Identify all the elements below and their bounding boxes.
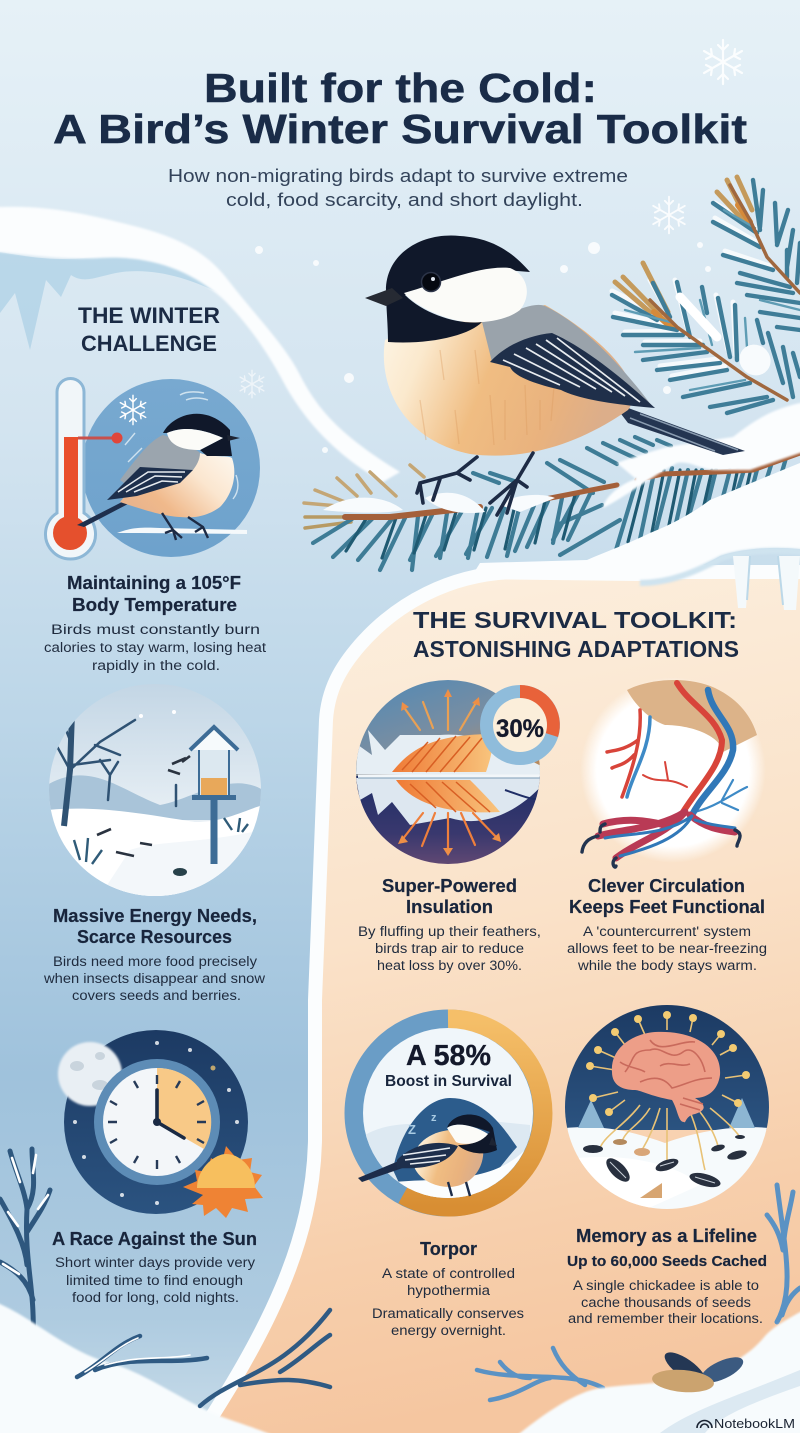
description: hypothermia (407, 1283, 491, 1298)
sunflower seeds (651, 1347, 747, 1395)
white cheek (404, 268, 527, 322)
grass and insects (74, 818, 248, 864)
bare tree bottom left (0, 1149, 50, 1335)
subtitle: How non-migrating birds adapt to survive extreme (168, 165, 628, 186)
panel: insulation (356, 680, 560, 973)
sleep letters: Z (408, 1122, 416, 1137)
heading: Super-Powered (382, 876, 517, 896)
stat: Boost in Survival (385, 1073, 512, 1090)
heat arrows (402, 695, 497, 850)
title: Built for the Cold: (204, 65, 597, 111)
bare tree (64, 712, 72, 826)
heading (382, 876, 517, 917)
description (567, 924, 767, 973)
description: while the body stays warm. (577, 958, 757, 973)
stat (385, 1040, 512, 1090)
progress ring (354, 1019, 543, 1207)
wing (490, 333, 655, 408)
feather texture (420, 350, 555, 445)
panel: circulation (567, 677, 767, 973)
description: allows feet to be near-freezing (567, 941, 767, 956)
pine branch upper right (612, 177, 800, 413)
panel: race against the sun (52, 1030, 263, 1305)
description: Dramatically conserves (372, 1306, 524, 1321)
snow bank right (470, 458, 800, 581)
description: and remember their locations. (568, 1311, 763, 1326)
description: Birds must constantly burn (51, 622, 260, 637)
description (372, 1266, 524, 1338)
title (53, 65, 747, 152)
heading (569, 876, 765, 917)
illustration circle (82, 379, 260, 557)
tail (612, 402, 745, 455)
twigs left (77, 1310, 330, 1406)
scene (360, 1025, 536, 1205)
heading: Torpor (420, 1239, 477, 1259)
description (55, 1255, 255, 1305)
description: food for long, cold nights. (72, 1290, 239, 1305)
title: A Bird’s Winter Survival Toolkit (53, 106, 747, 152)
description: birds trap air to reduce (375, 941, 524, 956)
right peach panel (190, 572, 800, 1433)
light dots (586, 1011, 750, 1116)
heading: the survival toolkit (413, 607, 739, 662)
setting sun (183, 1146, 263, 1218)
hills (47, 775, 263, 820)
description: Short winter days provide very (55, 1255, 255, 1270)
description: energy overnight. (391, 1323, 506, 1338)
description: cache thousands of seeds (581, 1295, 751, 1310)
small chickadee (77, 392, 247, 540)
snow clump on pine (733, 338, 777, 382)
dark night disc (64, 1030, 248, 1214)
twigs right (477, 1348, 603, 1400)
top left snow drift and white ribbon (0, 205, 400, 482)
heading: Maintaining a 105°F (67, 573, 241, 593)
snowflake icons (240, 40, 742, 398)
eye (422, 272, 440, 292)
head black (386, 236, 530, 343)
heading: Massive Energy Needs, (53, 906, 257, 926)
heading: the survival toolkit: ASTONISHING ADAPTATIONS (413, 636, 739, 662)
leg feathers (627, 680, 757, 752)
heading (53, 906, 257, 947)
thermometer (46, 378, 122, 559)
stars (73, 1041, 239, 1205)
winter scene circle (47, 684, 263, 896)
subtitle: cold, food scarcity, and short daylight. (226, 189, 583, 210)
heading: Keeps Feet Functional (569, 897, 765, 917)
snow shading (660, 1370, 800, 1433)
description (568, 1278, 763, 1326)
feather circle (356, 680, 545, 872)
blood vessels (582, 683, 747, 867)
30% ring: 30% (496, 715, 544, 743)
moon (58, 1042, 122, 1106)
white circle (580, 677, 766, 863)
sleep letters (408, 1112, 437, 1137)
heading: the winter challenge (78, 303, 220, 356)
description (358, 924, 541, 973)
description: rapidly in the cold. (92, 658, 220, 673)
panel: memory (565, 1005, 769, 1326)
heading: Clever Circulation (588, 876, 745, 896)
heading (67, 573, 241, 615)
den (393, 1098, 517, 1185)
description (43, 954, 265, 1003)
description: covers seeds and berries. (72, 988, 241, 1003)
neural lines (590, 1015, 746, 1170)
heading: the winter challenge: CHALLENGE (81, 331, 217, 356)
description (44, 622, 266, 673)
panel: energy needs (43, 684, 265, 1003)
bird feeder (190, 727, 238, 864)
description: when insects disappear and snow (43, 971, 265, 986)
body (384, 305, 633, 456)
heading: A Race Against the Sun (52, 1229, 257, 1249)
pines (578, 1098, 755, 1128)
description: A state of controlled (382, 1266, 515, 1281)
description: A 'countercurrent' system (583, 924, 751, 939)
description: Birds need more food precisely (53, 954, 257, 969)
wing stripes (503, 338, 640, 402)
snow ground (47, 805, 263, 896)
heading: Insulation (406, 897, 493, 917)
brain (612, 1032, 720, 1122)
description: A single chickadee is able to (573, 1278, 759, 1293)
clock (94, 1059, 220, 1185)
panel: torpor (354, 1019, 543, 1338)
main pine branch (304, 437, 800, 570)
beak (365, 288, 403, 306)
legs and claws (417, 453, 533, 515)
feather vane (356, 730, 545, 776)
heading: Scarce Resources (77, 927, 232, 947)
snow bank bottom right (500, 1305, 800, 1433)
sleeping chickadee (358, 1114, 497, 1196)
seeds (583, 1135, 748, 1198)
description: calories to stay warm, losing heat (44, 640, 266, 655)
falling snow dots (255, 242, 711, 453)
subtitle (168, 165, 628, 210)
stat: A 58% (406, 1040, 491, 1072)
snow bank bottom left (0, 1296, 300, 1433)
panel: body temperature (44, 378, 266, 673)
heading: the survival toolkit: THE SURVIVAL TOOLKIT: (413, 607, 737, 633)
heading: Memory as a Lifeline (576, 1226, 757, 1246)
snow bank shadow (640, 551, 800, 583)
NotebookLM mark: NotebookLM (714, 1416, 795, 1431)
snow on branch (603, 400, 800, 508)
heading: Body Temperature (72, 595, 237, 615)
big chickadee (365, 236, 745, 515)
snow ground (565, 1127, 769, 1210)
snow on twig (323, 493, 555, 513)
30% ring (480, 685, 560, 765)
description: By fluffing up their feathers, (358, 924, 541, 939)
brain circle (565, 1005, 769, 1212)
description: limited time to find enough (66, 1273, 243, 1288)
snowflake (120, 395, 146, 425)
stat: Up to 60,000 Seeds Cached (567, 1253, 767, 1270)
description: heat loss by over 30%. (377, 958, 522, 973)
icicles right (733, 556, 800, 610)
bare tree bottom right (767, 1185, 800, 1322)
heading: the winter challenge: THE WINTER (78, 303, 220, 328)
grey back (482, 305, 652, 406)
sleep letters: z (431, 1112, 437, 1124)
